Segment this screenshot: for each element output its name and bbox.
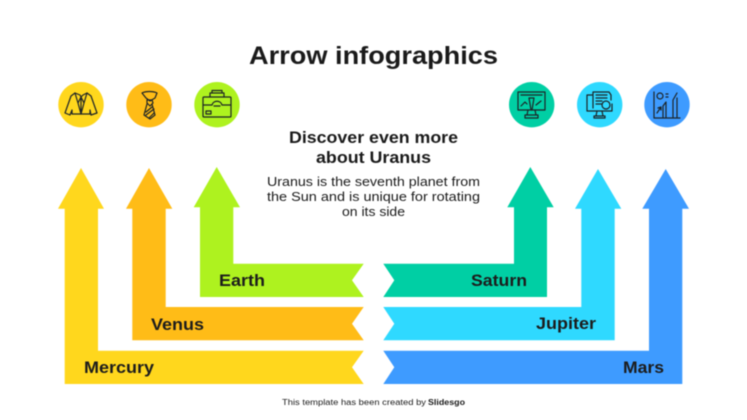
arrow: Saturn: Saturn xyxy=(471,271,527,290)
arrow: Saturn xyxy=(383,167,554,297)
arrow: Venus xyxy=(126,168,364,340)
footer credit: This template has been created by xyxy=(282,398,426,407)
icon: monitor with document xyxy=(577,82,622,127)
arrow: Jupiter: Jupiter xyxy=(536,314,596,333)
arrow: Venus: Venus xyxy=(151,315,204,334)
text block: description xyxy=(267,175,480,219)
icon: tie xyxy=(126,82,172,127)
footer credit xyxy=(282,398,465,407)
arrow: Earth xyxy=(194,167,364,297)
arrow: Mercury: Mercury xyxy=(84,358,155,377)
arrow: Mars xyxy=(383,169,689,384)
heading: Discover even more about Uranus: about Uranus xyxy=(316,148,431,167)
heading: Discover even more about Uranus: Discover even more xyxy=(289,128,458,147)
arrow: Earth: Earth xyxy=(219,271,265,290)
text block: description: Uranus is the seventh planet from xyxy=(267,175,480,189)
icon: monitor with chart xyxy=(509,82,554,127)
footer credit: Slidesgo xyxy=(428,398,465,407)
arrow: Mars: Mars xyxy=(623,358,664,377)
icon: jacket xyxy=(58,82,104,127)
title: Arrow infographics xyxy=(249,42,498,70)
icon: growth chart xyxy=(644,82,690,127)
text block: description: on its side xyxy=(342,205,405,219)
heading: Discover even more about Uranus xyxy=(289,128,458,167)
icon: briefcase xyxy=(194,82,240,127)
arrow: Jupiter xyxy=(383,169,621,340)
text block: description: the Sun and is unique for rotating xyxy=(267,190,480,204)
arrow: Mercury xyxy=(58,168,364,384)
